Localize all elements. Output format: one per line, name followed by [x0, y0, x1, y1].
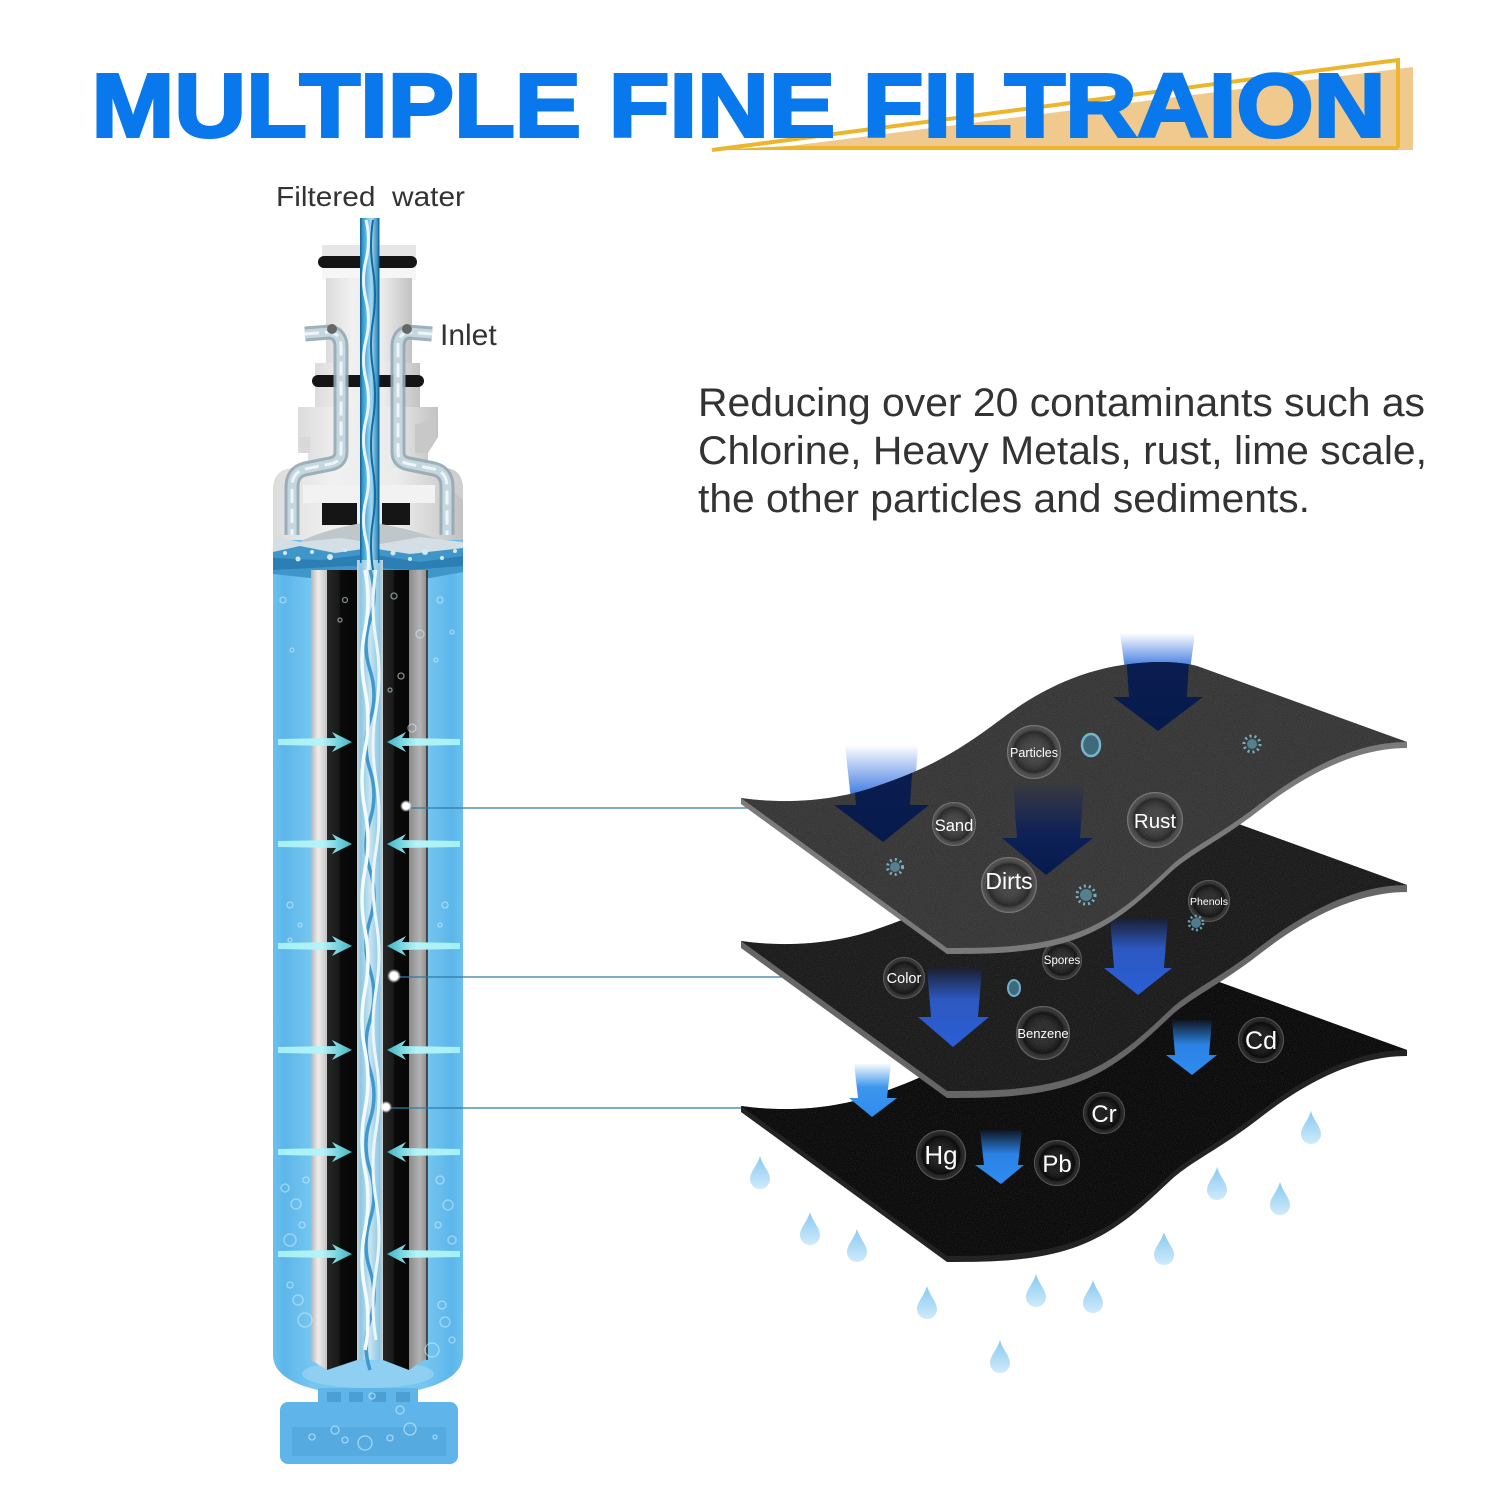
cartridge top fitting [298, 245, 438, 468]
sheet 2 surface [741, 805, 1407, 1098]
bubble Benzene: Benzene [1017, 1026, 1069, 1041]
bubble Color [883, 957, 925, 999]
bubble Pb: Pb [1042, 1151, 1072, 1178]
bubble Hg: Hg [924, 1140, 958, 1170]
connector lines from cartridge to layers [386, 808, 785, 1108]
sheet 1 surface [741, 662, 1407, 954]
arrow on sheet 3 right [1166, 1020, 1217, 1075]
bubble Dirts [981, 857, 1037, 913]
bubble Color: Color [887, 971, 921, 987]
arrow on sheet 3 bottom [975, 1130, 1024, 1184]
bubble Particles [1007, 725, 1061, 779]
bubble Benzene [1016, 1006, 1070, 1060]
filter layer 2: chemicals [741, 805, 1407, 1098]
bubble Cr: Cr [1091, 1101, 1117, 1128]
bubble Hg [916, 1130, 966, 1180]
clean water drops [750, 1111, 1321, 1373]
bubble Particles: Particles [1010, 746, 1058, 760]
inlet tube left [292, 324, 341, 535]
description text: the other particles and sediments. [698, 477, 1310, 521]
bubble Cd: Cd [1245, 1027, 1277, 1055]
title accent: gold triangle [712, 60, 1413, 150]
microbe blob [1082, 734, 1100, 756]
arrow on sheet 2 left [918, 968, 989, 1047]
bubble Cr [1083, 1092, 1125, 1134]
sheet 3 surface [741, 970, 1407, 1262]
dark arrows on sheet 1 [834, 640, 1203, 875]
bubble Spores [1042, 940, 1082, 980]
filter cartridge diagram [273, 218, 463, 1464]
bubble Phenols: Phenols [1190, 896, 1228, 908]
microbe blob [1008, 980, 1020, 996]
filter layer 3: heavy metals [741, 970, 1407, 1262]
bubble Cd [1238, 1017, 1284, 1063]
microbe [888, 860, 902, 874]
arrow entering sheet 3 [849, 1063, 897, 1117]
water surface [273, 522, 463, 578]
bubble Rust: Rust [1134, 810, 1176, 833]
bubble Sand: Sand [935, 817, 973, 835]
cartridge base [280, 1388, 458, 1464]
description text [698, 381, 1427, 521]
top arrow shaft above sheet 1 [1120, 633, 1195, 670]
filter layer 1: sediment [741, 633, 1407, 954]
label: filtered water: Filtered water [276, 181, 465, 212]
microbe [1244, 736, 1260, 752]
label: inlet: Inlet [440, 319, 497, 352]
filter media layers [311, 570, 428, 1370]
title text: MULTIPLE FINE FILTRAION [92, 56, 1386, 156]
connector dots [380, 800, 412, 1113]
microbe [1189, 916, 1203, 930]
description text: Reducing over 20 contaminants such as [698, 381, 1425, 425]
bubble Rust [1127, 792, 1183, 848]
cartridge body [273, 468, 463, 1400]
description text: Chlorine, Heavy Metals, rust, lime scale, [698, 429, 1427, 473]
inward flow arrows [278, 732, 460, 1264]
central filtered water tube [357, 218, 383, 1370]
title [92, 56, 1413, 156]
bubble Phenols [1188, 880, 1230, 922]
left arrow shaft above sheet 1 [845, 745, 918, 800]
bubble Spores: Spores [1044, 955, 1080, 967]
bubble Dirts: Dirts [985, 868, 1033, 894]
inlet tube right [398, 324, 447, 535]
bubble Pb [1034, 1140, 1080, 1186]
bubble Sand [932, 802, 976, 846]
bubbles inside the water [280, 593, 456, 1357]
microbe [1077, 886, 1095, 904]
arrow on sheet 2 right [1104, 918, 1172, 995]
